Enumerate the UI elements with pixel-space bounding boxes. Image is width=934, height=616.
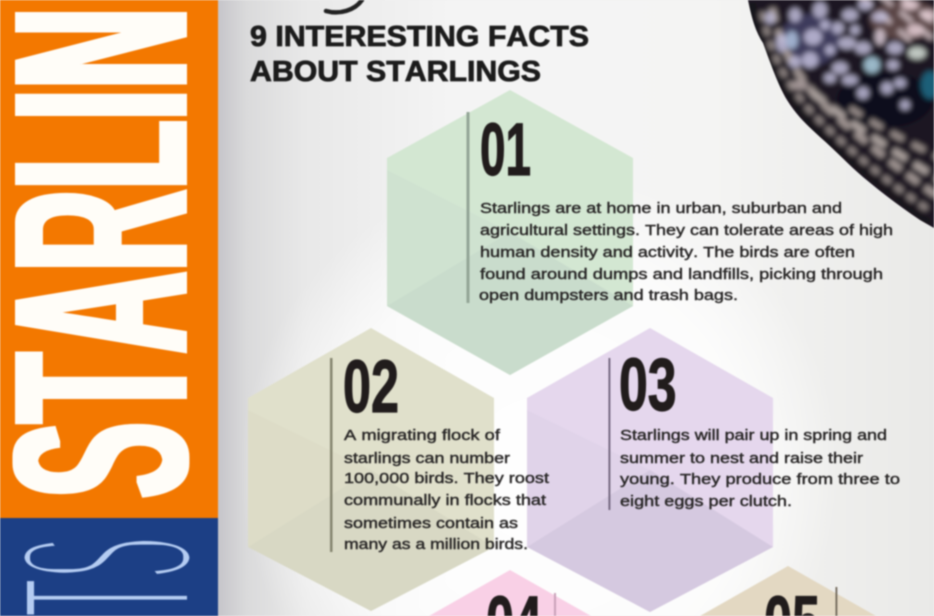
text: fact 03: Starlings will pair up in spring and	[620, 428, 887, 444]
background	[218, 0, 934, 616]
text: fact 03: eight eggs per clutch.	[620, 494, 792, 510]
panel: fact 05	[700, 566, 876, 616]
panel: orange sidebar with STARLINGS	[0, 0, 241, 518]
hexagon 01	[387, 90, 633, 375]
panel: fact 02	[248, 328, 549, 611]
text: fact 01: open dumpsters and trash bags.	[479, 288, 738, 304]
panel: fact 01	[387, 90, 893, 375]
text: fact 02: communally in flocks that	[344, 493, 546, 509]
heading	[250, 21, 589, 88]
hexagon 04	[429, 570, 591, 616]
panel: blue sidebar with FACTS	[0, 518, 247, 616]
text: fact 02: 100,000 birds. They roost	[344, 471, 549, 487]
text: fact 02: many as a million birds.	[344, 537, 528, 553]
text: fact 01: found around dumps and landfills, picking through	[480, 267, 883, 283]
text: fact 01: Starlings are at home in urban, suburban and	[480, 201, 842, 217]
text: fact 02: starlings can number	[344, 451, 510, 467]
text: fact 03	[620, 428, 900, 510]
heading: ABOUT STARLINGS	[250, 56, 541, 88]
text: fact 03: young. They produce from three to	[620, 472, 900, 488]
panel: fact 03	[527, 328, 900, 612]
number 02: 02	[343, 347, 399, 428]
text: fact 02	[344, 428, 549, 553]
image: starling plumage	[735, 0, 934, 235]
panel: fact 04	[429, 570, 591, 616]
text: fact 02: sometimes contain as	[344, 516, 518, 532]
hexagon 02	[248, 328, 494, 611]
text: fact 01: human density and activity. The birds are often	[480, 245, 855, 261]
hexagon 05	[700, 566, 876, 616]
number 03: 03	[619, 343, 677, 426]
heading: 9 INTERESTING FACTS	[250, 21, 589, 53]
hexagon 03	[527, 328, 773, 612]
text: fact 01: agricultural settings. They can tolerate areas of high	[480, 223, 893, 239]
number 01: 01	[480, 109, 531, 192]
text: fact 02: A migrating flock of	[344, 428, 501, 444]
title script fragment	[326, 0, 362, 12]
text: fact 01	[479, 201, 893, 304]
text: fact 03: summer to nest and raise their	[620, 451, 863, 467]
